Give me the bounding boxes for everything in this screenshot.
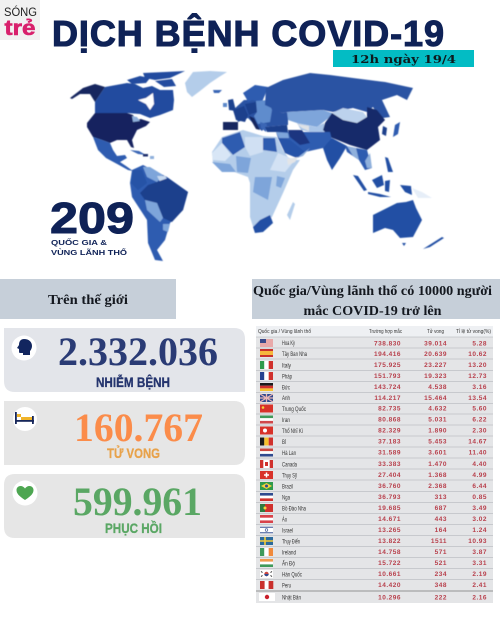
row: Bồ Đào Nha: 19.685 bbox=[378, 505, 401, 512]
row: Peru bbox=[260, 581, 487, 590]
row: Anh: Anh bbox=[282, 395, 290, 402]
row: Hà Lan: Hà Lan bbox=[282, 450, 296, 457]
row: Trung Quốc: Trung Quốc bbox=[282, 404, 306, 413]
map: Europe bbox=[213, 85, 288, 132]
row: Pháp: Pháp bbox=[282, 374, 292, 380]
row: Áo bbox=[260, 514, 487, 524]
heading: countries over 10000 cases bbox=[252, 279, 500, 319]
row: Thụy Điển: 1511 bbox=[431, 538, 447, 545]
row: Hà Lan: 3.601 bbox=[428, 450, 447, 456]
map: Mongolia bbox=[332, 108, 367, 123]
row: Tây Ban Nha bbox=[260, 349, 487, 358]
date badge bbox=[333, 50, 474, 67]
row: Israel: 1.24 bbox=[472, 527, 487, 534]
row: Áo: Áo bbox=[282, 514, 287, 524]
row: Israel: Israel bbox=[282, 528, 293, 534]
row: Bồ Đào Nha bbox=[260, 504, 487, 512]
heading: world: Trên thế giới bbox=[48, 293, 128, 308]
row: Italy: 13.20 bbox=[468, 362, 487, 369]
row: Ireland bbox=[260, 548, 487, 556]
row: Nhật Bản: 10.296 bbox=[378, 594, 401, 602]
stat: 209 countries and territories: QUỐC GIA & bbox=[51, 237, 108, 247]
map: Hudson Bay bbox=[138, 93, 154, 110]
row: Ấn Độ: 521 bbox=[435, 560, 447, 567]
row: Iran: Iran bbox=[282, 417, 290, 424]
row: Áo: 3.02 bbox=[472, 516, 487, 523]
map: Russia bbox=[265, 73, 413, 118]
map: New Zealand and Tasmania bbox=[402, 237, 444, 249]
logo: Sóng Trẻ: SÓNG bbox=[4, 6, 37, 19]
row: Thổ Nhĩ Kì: 1.890 bbox=[428, 428, 447, 434]
row: Thổ Nhĩ Kì: 2.30 bbox=[472, 428, 487, 434]
row: Ireland: 571 bbox=[435, 549, 447, 556]
row: Italy bbox=[260, 361, 487, 370]
row: Canada: Canada bbox=[282, 462, 297, 468]
row: Thổ Nhĩ Kì: 82.329 bbox=[378, 428, 401, 434]
row: Tây Ban Nha: 194.416 bbox=[374, 351, 401, 358]
table header bbox=[258, 328, 491, 335]
row: Italy: Italy bbox=[282, 362, 291, 370]
world map bbox=[70, 71, 444, 261]
row: Anh bbox=[260, 394, 487, 402]
row: Ireland: 3.87 bbox=[472, 549, 487, 556]
row: Hoa Kỳ: 39.014 bbox=[424, 340, 447, 348]
row: Thụy Sỹ: Thụy Sỹ bbox=[282, 472, 297, 480]
row: Bỉ: Bỉ bbox=[282, 438, 286, 446]
row: Brazil bbox=[260, 482, 487, 490]
label: infections: NHIỄM BỆNH bbox=[96, 375, 170, 390]
logo: Sóng Trẻ bbox=[0, 0, 40, 40]
row: Trung Quốc: 5.60 bbox=[472, 406, 487, 412]
row: Đức: 4.538 bbox=[428, 384, 447, 391]
row: Anh: 13.54 bbox=[468, 395, 487, 402]
map: Alaska bbox=[70, 84, 105, 102]
row: Trung Quốc: 82.735 bbox=[378, 406, 401, 412]
stat: 209 countries and territories: 209 bbox=[50, 194, 134, 243]
heading: countries over 10000 cases: mắc COVID-19 trở lên bbox=[304, 304, 442, 319]
row: Thụy Sỹ: 4.99 bbox=[472, 472, 487, 479]
heading: world bbox=[0, 279, 176, 319]
stat: 209 countries and territories bbox=[50, 194, 134, 257]
row: Peru: Peru bbox=[282, 582, 291, 590]
row: Bồ Đào Nha: 687 bbox=[435, 505, 447, 512]
map: Great Lakes bbox=[132, 116, 140, 122]
row: Hà Lan bbox=[260, 448, 487, 457]
label: deaths: TỬ VONG bbox=[107, 446, 160, 461]
row: Nga: 36.793 bbox=[378, 494, 401, 501]
row: Nga: 0.85 bbox=[472, 494, 487, 501]
row: Ấn Độ: Ấn Độ bbox=[282, 558, 295, 568]
row: Thụy Sỹ: 27.404 bbox=[378, 472, 401, 479]
row: Hoa Kỳ bbox=[260, 339, 487, 348]
row: Ấn Độ: 3.31 bbox=[472, 560, 487, 567]
title: DỊCH BỆNH COVID-19 bbox=[52, 12, 444, 54]
row: Hàn Quốc bbox=[260, 570, 487, 578]
row: Nhật Bản: 222 bbox=[435, 594, 447, 602]
row: Canada: 1.470 bbox=[428, 461, 447, 468]
row: Nhật Bản: Nhật Bản bbox=[282, 594, 301, 602]
row: Đức: 3.16 bbox=[472, 384, 487, 391]
row: Tây Ban Nha: Tây Ban Nha bbox=[282, 351, 307, 358]
table header: Tử vong bbox=[427, 328, 444, 335]
row: Thụy Sỹ: 1.368 bbox=[428, 472, 447, 479]
row: Thụy Điển bbox=[260, 537, 487, 546]
map: China bbox=[323, 107, 385, 150]
row: Italy: 175.925 bbox=[374, 362, 401, 369]
row: Hoa Kỳ: 5.28 bbox=[472, 340, 487, 348]
row: Hàn Quốc: Hàn Quốc bbox=[282, 570, 302, 578]
row: Brazil: 2.368 bbox=[428, 483, 447, 490]
date badge: 12h ngày 19/4 bbox=[351, 53, 456, 66]
row: Hàn Quốc: 10.661 bbox=[378, 571, 401, 578]
row: Thụy Điển: Thụy Điển bbox=[282, 538, 300, 546]
row: Iran: 5.031 bbox=[428, 416, 447, 424]
icon: heart bbox=[12, 480, 38, 506]
map: Africa bbox=[212, 130, 300, 233]
number: recovered: 599.961 bbox=[73, 479, 202, 524]
logo: Sóng Trẻ: trẻ bbox=[4, 17, 36, 40]
row: Trung Quốc: 4.632 bbox=[428, 406, 447, 412]
row: Thụy Sỹ bbox=[260, 471, 487, 480]
row: Israel bbox=[260, 526, 487, 534]
map: Caribbean bbox=[130, 150, 154, 159]
row: Áo: 14.671 bbox=[378, 516, 401, 523]
row: Iran bbox=[260, 416, 487, 424]
row: Pháp: 151.793 bbox=[374, 373, 401, 380]
row: Anh: 15.464 bbox=[424, 395, 447, 402]
row: Brazil: 6.44 bbox=[472, 483, 487, 490]
number: deaths: 160.767 bbox=[74, 405, 203, 450]
map: Mexico and Central America bbox=[93, 137, 133, 171]
table header: Trường hợp mắc bbox=[369, 328, 402, 335]
card: infections bbox=[4, 328, 245, 392]
number: infections: 2.332.036 bbox=[58, 329, 218, 374]
row: Bỉ: 14.67 bbox=[468, 438, 487, 446]
row: Nhật Bản bbox=[259, 593, 487, 602]
row: Trung Quốc bbox=[260, 404, 487, 413]
card: recovered bbox=[4, 474, 245, 538]
row: Bỉ bbox=[260, 438, 487, 446]
row: Tây Ban Nha: 20.639 bbox=[424, 351, 447, 358]
table: countries bbox=[256, 326, 493, 603]
map: Kazakhstan and Central Asia bbox=[287, 110, 332, 132]
row: Hà Lan: 11.40 bbox=[469, 450, 487, 456]
row: Thụy Điển: 13.822 bbox=[378, 538, 401, 545]
row: Đức bbox=[260, 383, 487, 392]
map: Greenland bbox=[185, 71, 227, 97]
row: Canada: 4.40 bbox=[472, 461, 487, 468]
row: Ireland: 14.758 bbox=[378, 549, 401, 556]
row: Nga: 313 bbox=[435, 494, 447, 501]
map: Australia bbox=[373, 200, 422, 238]
row: Hoa Kỳ: 738.830 bbox=[374, 340, 401, 348]
row: Italy: 23.227 bbox=[424, 362, 447, 369]
row: Brazil: Brazil bbox=[282, 484, 293, 490]
icon: head bbox=[12, 336, 36, 360]
row: Iran: 6.22 bbox=[472, 416, 487, 424]
row: Pháp bbox=[260, 372, 487, 380]
row: Bỉ: 5.453 bbox=[428, 438, 447, 446]
row: Ấn Độ bbox=[260, 558, 487, 568]
card: deaths bbox=[4, 401, 245, 465]
row: Iran: 80.868 bbox=[378, 416, 401, 424]
row: Israel: 13.265 bbox=[378, 527, 401, 534]
row: Hoa Kỳ: Hoa Kỳ bbox=[282, 340, 295, 347]
map: Middle East bbox=[265, 125, 332, 165]
label: recovered: PHỤC HỒI bbox=[105, 521, 162, 536]
row: Pháp: 19.323 bbox=[424, 373, 447, 380]
row: Ireland: Ireland bbox=[282, 550, 296, 556]
row: Hàn Quốc: 2.19 bbox=[472, 571, 487, 578]
row: Canada bbox=[260, 460, 487, 468]
row: Israel: 164 bbox=[435, 527, 447, 534]
row: Đức: 143.724 bbox=[374, 384, 401, 391]
row: Anh: 114.217 bbox=[374, 395, 401, 402]
stat: 209 countries and territories: VÙNG LÃNH THỔ bbox=[51, 248, 127, 257]
map: United States bbox=[87, 113, 150, 148]
row: Canada: 33.383 bbox=[378, 461, 401, 468]
row: Nga: Nga bbox=[282, 494, 290, 502]
row: Thụy Điển: 10.93 bbox=[468, 538, 487, 545]
row: Hà Lan: 31.589 bbox=[378, 450, 401, 456]
row: Peru: 2.41 bbox=[472, 582, 487, 589]
row: Hàn Quốc: 234 bbox=[435, 571, 447, 578]
map: South and Southeast Asia bbox=[323, 122, 432, 198]
map: Canada bbox=[95, 71, 185, 118]
row: Bồ Đào Nha: 3.49 bbox=[472, 505, 487, 512]
icon: bed bbox=[13, 407, 37, 431]
row: Bồ Đào Nha: Bồ Đào Nha bbox=[282, 504, 306, 512]
row: Pháp: 12.73 bbox=[468, 373, 487, 380]
table header: Quốc gia / Vùng lãnh thổ bbox=[258, 328, 311, 335]
row: Peru: 348 bbox=[435, 582, 447, 589]
row: Peru: 14.420 bbox=[378, 582, 401, 589]
map: South America bbox=[130, 165, 188, 261]
row: Brazil: 36.760 bbox=[378, 483, 401, 490]
heading: countries over 10000 cases: Quốc gia/Vùng lãnh thổ có 10000 người bbox=[253, 284, 492, 299]
row: Thổ Nhĩ Kì: Thổ Nhĩ Kì bbox=[282, 427, 303, 435]
row: Ấn Độ: 15.722 bbox=[378, 560, 401, 567]
row: Áo: 443 bbox=[435, 516, 447, 523]
table header: Tỉ lệ tử vong(%) bbox=[456, 328, 491, 335]
row: Nhật Bản: 2.16 bbox=[472, 594, 487, 602]
row: Đức: Đức bbox=[282, 384, 290, 392]
row: Nga bbox=[260, 493, 487, 502]
row: Thổ Nhĩ Kì bbox=[260, 426, 487, 435]
row: Tây Ban Nha: 10.62 bbox=[468, 351, 487, 358]
row: Bỉ: 37.183 bbox=[378, 438, 401, 446]
